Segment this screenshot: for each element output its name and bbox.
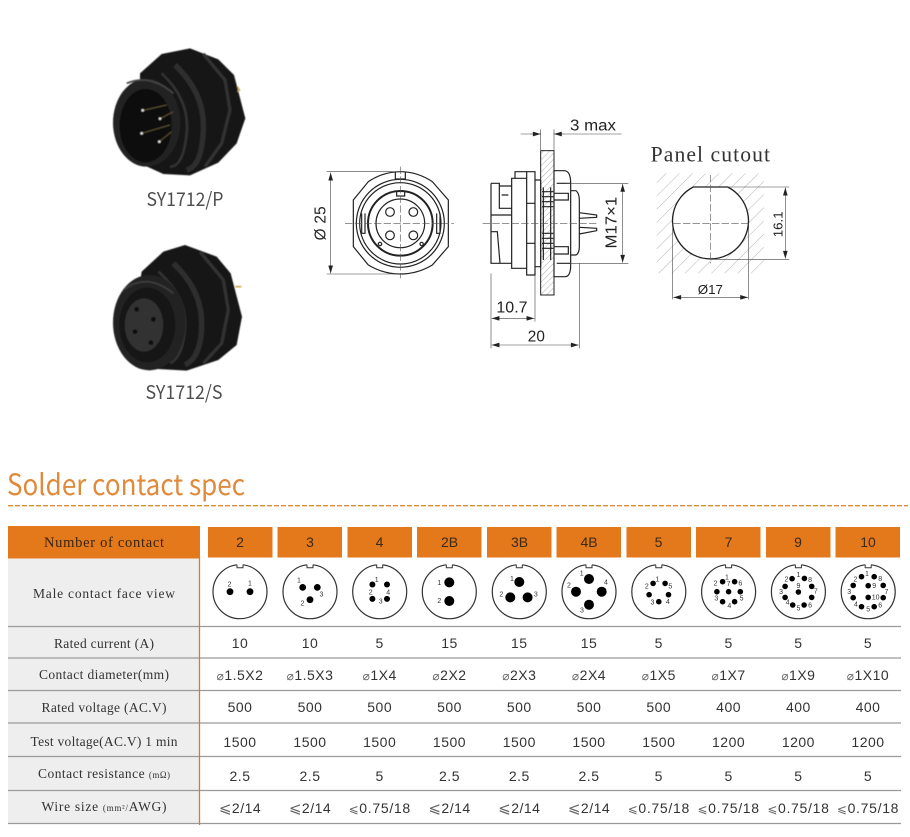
face: 5 contacts: 4 — [666, 599, 670, 606]
heading: Panel cutout: Panel cutout — [651, 143, 770, 167]
row values: rated voltage: 500 — [228, 699, 252, 715]
row values: wire size: ⩽0.75/18 — [349, 800, 411, 816]
row values: rated current: 5 — [655, 635, 663, 651]
face: 7 contacts — [702, 563, 756, 619]
row values: test voltage: 1500 — [433, 734, 466, 750]
row values: contact diameter: ⌀1X10 — [847, 667, 889, 683]
row values: test voltage: 1500 — [293, 734, 327, 750]
row values: contact resistance — [230, 768, 872, 784]
header labels: 3 — [306, 534, 314, 550]
face: 10 contacts: 8 — [878, 576, 882, 583]
row values: contact diameter: ⌀1X9 — [781, 667, 815, 683]
face: 4B contacts: 3 — [580, 608, 584, 615]
row values: rated current: 10 — [302, 635, 318, 651]
row values: wire size: ⩽0.75/18 — [837, 800, 899, 816]
row values: rated voltage: 500 — [367, 699, 392, 715]
row values: test voltage: 1500 — [503, 734, 536, 750]
face: 3 contacts: 3 — [320, 592, 324, 599]
label: SY1712/S: SY1712/S — [146, 378, 222, 405]
row values: rated voltage: 500 — [507, 699, 532, 715]
face: 2 contacts: 1 — [248, 581, 252, 588]
face: 2B contacts: 1 — [437, 580, 441, 587]
row values: contact resistance: 5 — [864, 768, 872, 784]
face: 10 contacts: 4 — [854, 602, 858, 609]
row values: rated voltage — [228, 699, 880, 715]
drawing: panel cutout — [651, 143, 789, 299]
row values: rated voltage: 400 — [856, 699, 880, 715]
face: 3 contacts — [283, 563, 337, 619]
header labels: 2B — [441, 534, 458, 550]
face: 2 contacts: 2 — [228, 582, 232, 589]
dimension: M17x1: M17×1 — [604, 197, 621, 248]
face: 10 contacts: 6 — [878, 603, 882, 610]
dimension: diameter 25: Ø 25 — [312, 206, 329, 240]
face: 10 contacts — [841, 563, 895, 619]
row values: rated current: 5 — [864, 635, 872, 651]
row values: contact resistance: 5 — [655, 768, 663, 784]
face: 4 contacts — [353, 563, 407, 619]
row values: rated current: 15 — [511, 635, 528, 651]
face: 9 contacts: 3 — [779, 589, 783, 596]
face: 9 contacts: 6 — [808, 603, 812, 610]
row labels: Rated voltage (AC.V) — [42, 700, 166, 715]
dimension: diameter 17: Ø17 — [698, 282, 723, 297]
row values: wire size: ⩽2/14 — [568, 799, 610, 817]
row values: wire size: ⩽2/14 — [219, 799, 261, 817]
face: 7 contacts: 5 — [740, 596, 744, 603]
face: 4B contacts — [562, 563, 616, 619]
face: 2 contacts — [213, 563, 267, 619]
face: 4 contacts: 3 — [379, 599, 383, 606]
section heading: Solder contact spec: Solder contact spec — [7, 462, 245, 504]
row values: rated current: 15 — [581, 635, 597, 651]
header labels: 4B — [580, 534, 598, 550]
face: 2B contacts: 2 — [437, 598, 441, 605]
header labels: 2 — [236, 534, 244, 550]
row values: contact diameter: ⌀1X4 — [363, 667, 397, 683]
face: 4 contacts: 4 — [386, 590, 390, 597]
dimension: 16.1: 16.1 — [771, 211, 786, 237]
contact face diagrams — [213, 563, 895, 619]
face: 9 contacts — [771, 563, 825, 619]
row values: contact resistance: 5 — [724, 768, 733, 784]
face: 9 contacts: 7 — [814, 589, 818, 596]
face: 10 contacts: 1 — [865, 571, 869, 578]
row values: rated voltage: 400 — [786, 699, 811, 715]
row values: test voltage: 1200 — [782, 734, 815, 750]
face: 4 contacts: 1 — [375, 577, 379, 584]
face: 5 contacts — [632, 563, 686, 619]
row values: test voltage — [223, 734, 885, 750]
header labels: 10 — [860, 534, 876, 550]
dimension: 20: 20 — [528, 329, 545, 346]
face: 10 contacts: 10 — [872, 595, 880, 602]
row values: wire size — [219, 799, 899, 817]
header row cells — [8, 526, 900, 558]
face: 7 contacts: 2 — [714, 581, 718, 588]
face: 7 contacts: 4 — [727, 603, 731, 610]
header labels: 7 — [725, 534, 733, 550]
row values: rated current: 5 — [376, 635, 384, 651]
row values: test voltage: 1200 — [851, 734, 885, 750]
row values: test voltage: 1500 — [642, 734, 675, 750]
face: 10 contacts: 9 — [872, 583, 876, 590]
row values: contact resistance: 5 — [376, 768, 384, 784]
row values: wire size: ⩽2/14 — [428, 799, 471, 817]
product photo: SY1712/P male connector — [113, 48, 245, 175]
row values: contact resistance: 5 — [794, 768, 803, 784]
row values: wire size: ⩽0.75/18 — [767, 800, 830, 816]
face: 5 contacts: 5 — [668, 584, 672, 591]
dimension: 3 max: 3 max — [570, 118, 616, 135]
spec table — [8, 526, 901, 825]
row values: contact resistance: 2.5 — [439, 768, 460, 784]
face: 4B contacts: 1 — [580, 571, 584, 578]
face: 9 contacts: 5 — [796, 606, 800, 613]
face: 5 contacts: 2 — [645, 584, 649, 591]
header labels: Number of contact — [44, 535, 164, 551]
face: 3B contacts: 2 — [499, 592, 503, 599]
row values: rated current: 10 — [232, 635, 248, 651]
row values: rated current: 15 — [441, 635, 458, 651]
row values: rated voltage: 400 — [716, 699, 741, 715]
face: 4 contacts: 2 — [369, 590, 373, 597]
row values: test voltage: 1500 — [363, 734, 396, 750]
row values: test voltage: 1200 — [712, 734, 745, 750]
row labels: Wire size (mm²/AWG) — [42, 799, 166, 814]
row values: rated voltage: 500 — [577, 699, 601, 715]
header labels — [44, 534, 876, 551]
row values: wire size: ⩽2/14 — [498, 799, 540, 817]
row values: rated current — [232, 635, 872, 651]
row values: rated current: 5 — [794, 635, 803, 651]
row label column background — [8, 558, 199, 824]
row values: wire size: ⩽0.75/18 — [697, 800, 760, 816]
drawing: side view with mounting dimensions — [483, 118, 628, 348]
face: 10 contacts: 3 — [847, 589, 851, 596]
header labels: 9 — [794, 534, 802, 550]
row values: contact diameter: ⌀1.5X2 — [217, 667, 263, 683]
face: 4B contacts: 4 — [604, 580, 608, 587]
row values: rated current: 5 — [724, 635, 733, 651]
row values: test voltage: 1500 — [572, 734, 606, 750]
header labels: 5 — [655, 534, 663, 550]
row labels: Male contact face view — [33, 586, 175, 601]
face: 7 contacts: 1 — [725, 575, 729, 582]
row values: contact resistance: 2.5 — [300, 768, 320, 784]
row values: test voltage: 1500 — [223, 734, 257, 750]
face: 9 contacts: 8 — [808, 577, 812, 584]
row labels: Contact resistance (mΩ) — [38, 766, 170, 781]
face: 3B contacts — [492, 563, 546, 619]
row labels: Test voltage(AC.V) 1 min — [30, 734, 178, 749]
row values: contact diameter: ⌀1X5 — [642, 667, 676, 683]
row values: rated voltage: 500 — [298, 699, 322, 715]
row values: wire size: ⩽2/14 — [289, 799, 331, 817]
face: 4B contacts: 2 — [567, 583, 571, 590]
face: 9 contacts: 2 — [784, 577, 788, 584]
row labels: Contact diameter(mm) — [39, 667, 169, 682]
row values: rated voltage: 500 — [437, 699, 462, 715]
product photo: SY1712/S female connector — [113, 245, 242, 371]
label: SY1712/P: SY1712/P — [146, 185, 224, 212]
row values: contact diameter: ⌀2X4 — [572, 667, 606, 683]
face: 5 contacts: 3 — [651, 600, 655, 607]
face: 3B contacts: 1 — [510, 576, 514, 583]
row values: rated voltage: 500 — [646, 699, 671, 715]
row values: contact diameter: ⌀2X2 — [432, 667, 467, 683]
drawing: front view with diameter dimension — [312, 167, 454, 278]
face: 9 contacts: 4 — [786, 600, 790, 607]
dimension: 10.7: 10.7 — [496, 300, 528, 317]
row values: wire size: ⩽0.75/18 — [628, 800, 690, 816]
face: 10 contacts: 7 — [885, 589, 889, 596]
face: 5 contacts: 1 — [656, 577, 660, 584]
face: 9 contacts: 1 — [796, 572, 800, 579]
row values: contact resistance: 2.5 — [509, 768, 530, 784]
face: 3 contacts: 1 — [297, 578, 301, 585]
row values: contact resistance: 2.5 — [579, 768, 599, 784]
row labels: Rated current (A) — [54, 636, 154, 651]
face: 7 contacts: 3 — [714, 596, 718, 603]
header labels: 3B — [511, 534, 528, 550]
face: 10 contacts: 5 — [866, 607, 870, 614]
face: 7 contacts: 7 — [727, 581, 731, 588]
face: 9 contacts: 9 — [796, 583, 800, 590]
row values: contact diameter — [217, 667, 889, 683]
face: 10 contacts: 2 — [854, 577, 858, 584]
row values: contact diameter: ⌀1X7 — [712, 667, 746, 683]
row values: contact resistance: 2.5 — [230, 768, 250, 784]
header labels: 4 — [376, 534, 384, 550]
row values: contact diameter: ⌀1.5X3 — [287, 667, 333, 683]
face: 2B contacts — [422, 563, 476, 619]
row labels — [30, 586, 178, 814]
face: 7 contacts: 6 — [738, 581, 742, 588]
face: 3 contacts: 2 — [301, 601, 305, 608]
face: 3B contacts: 3 — [534, 592, 538, 599]
row values: contact diameter: ⌀2X3 — [502, 667, 536, 683]
